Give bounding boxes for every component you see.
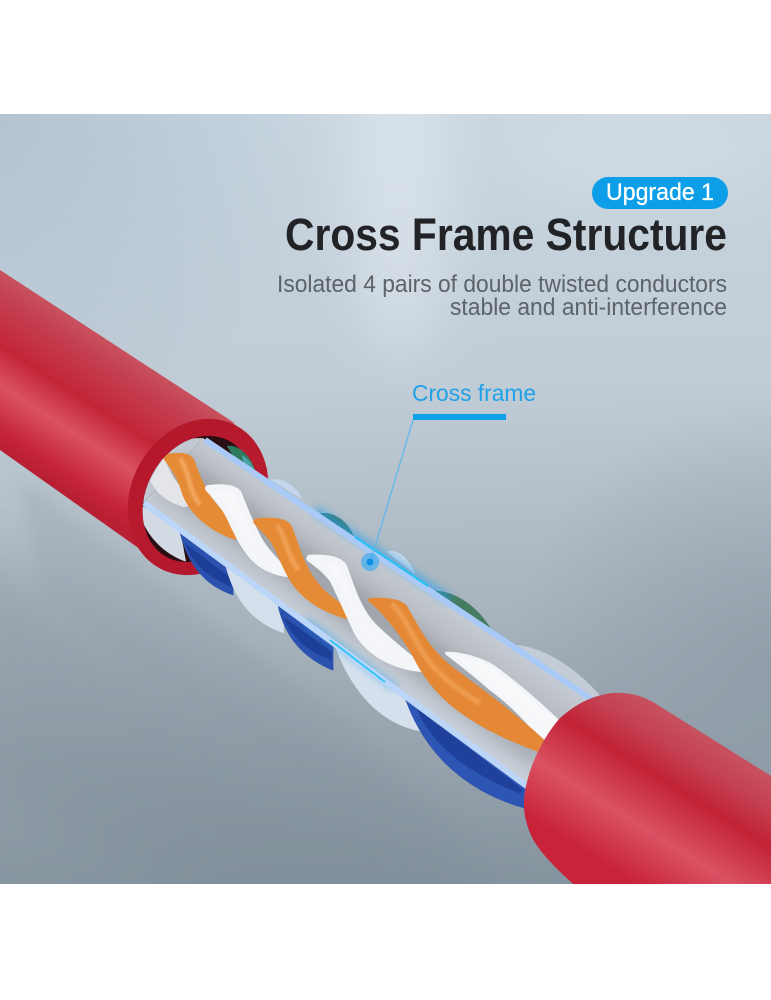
white strand 4 xyxy=(447,653,560,743)
frame lower edge glow xyxy=(305,620,395,688)
frame end inside opening xyxy=(143,438,203,503)
light upper wire 5 xyxy=(516,645,600,698)
subtitle: stable and anti-interference xyxy=(450,294,727,321)
jacket body xyxy=(0,270,236,548)
callout label: Cross frame xyxy=(412,380,536,406)
frame upper edge glow xyxy=(315,510,450,600)
right cable jacket xyxy=(524,693,771,890)
frame upper edge xyxy=(205,440,594,701)
white strand 2 xyxy=(208,488,290,574)
frame lower edge xyxy=(144,503,528,787)
jacket opening ring xyxy=(128,418,268,576)
blue lower wire 2 xyxy=(277,600,333,671)
subtitle xyxy=(277,271,727,321)
frame upper bright line xyxy=(355,537,428,586)
cross frame xyxy=(120,438,596,790)
frame spine xyxy=(143,438,596,790)
callout leader line xyxy=(371,420,413,560)
left cable jacket xyxy=(0,270,268,576)
callout underline xyxy=(413,414,506,420)
callout dot xyxy=(361,553,379,571)
orange strand 2 xyxy=(257,521,350,616)
callout: cross frame xyxy=(361,380,536,571)
white strand behind xyxy=(152,460,195,506)
green upper wire 4 xyxy=(435,591,491,629)
blue wire 1 shade xyxy=(185,543,232,587)
subtitle: Isolated 4 pairs of double twisted conductors xyxy=(277,271,727,298)
badge: Upgrade 1 xyxy=(592,177,728,209)
orange strand 1 xyxy=(165,455,235,537)
light lower wire 2 xyxy=(336,649,420,732)
photo background panel xyxy=(0,114,771,884)
badge: Upgrade 1: Upgrade 1 xyxy=(606,179,714,206)
green wire in opening xyxy=(227,446,255,470)
blue lower wire 3 xyxy=(403,693,527,808)
green upper wire 2 xyxy=(319,513,354,537)
light lower wire 1 xyxy=(225,563,284,633)
blue lower wire 1 xyxy=(180,533,234,596)
light wire in opening xyxy=(142,506,186,562)
frame shadow behind twist xyxy=(170,470,545,750)
orange 2 highlight xyxy=(277,525,298,570)
orange 3 highlight xyxy=(392,603,480,703)
orange 1 highlight xyxy=(180,458,200,505)
blue wire 3 shade xyxy=(417,708,523,793)
light upper wire 3 xyxy=(386,551,416,575)
dark cable interior xyxy=(142,436,240,562)
light upper wire 1 xyxy=(270,479,302,499)
white strand 3 xyxy=(310,558,422,668)
teal highlight on green wire xyxy=(242,455,254,469)
orange and white twisted pair xyxy=(152,455,560,751)
blue wire 2 shade xyxy=(283,617,332,660)
infographic canvas xyxy=(0,114,771,884)
wires behind the frame xyxy=(137,446,602,808)
orange strand 3 xyxy=(370,600,543,751)
title: Cross Frame Structure xyxy=(285,209,727,260)
frame lower bright line xyxy=(330,640,385,682)
